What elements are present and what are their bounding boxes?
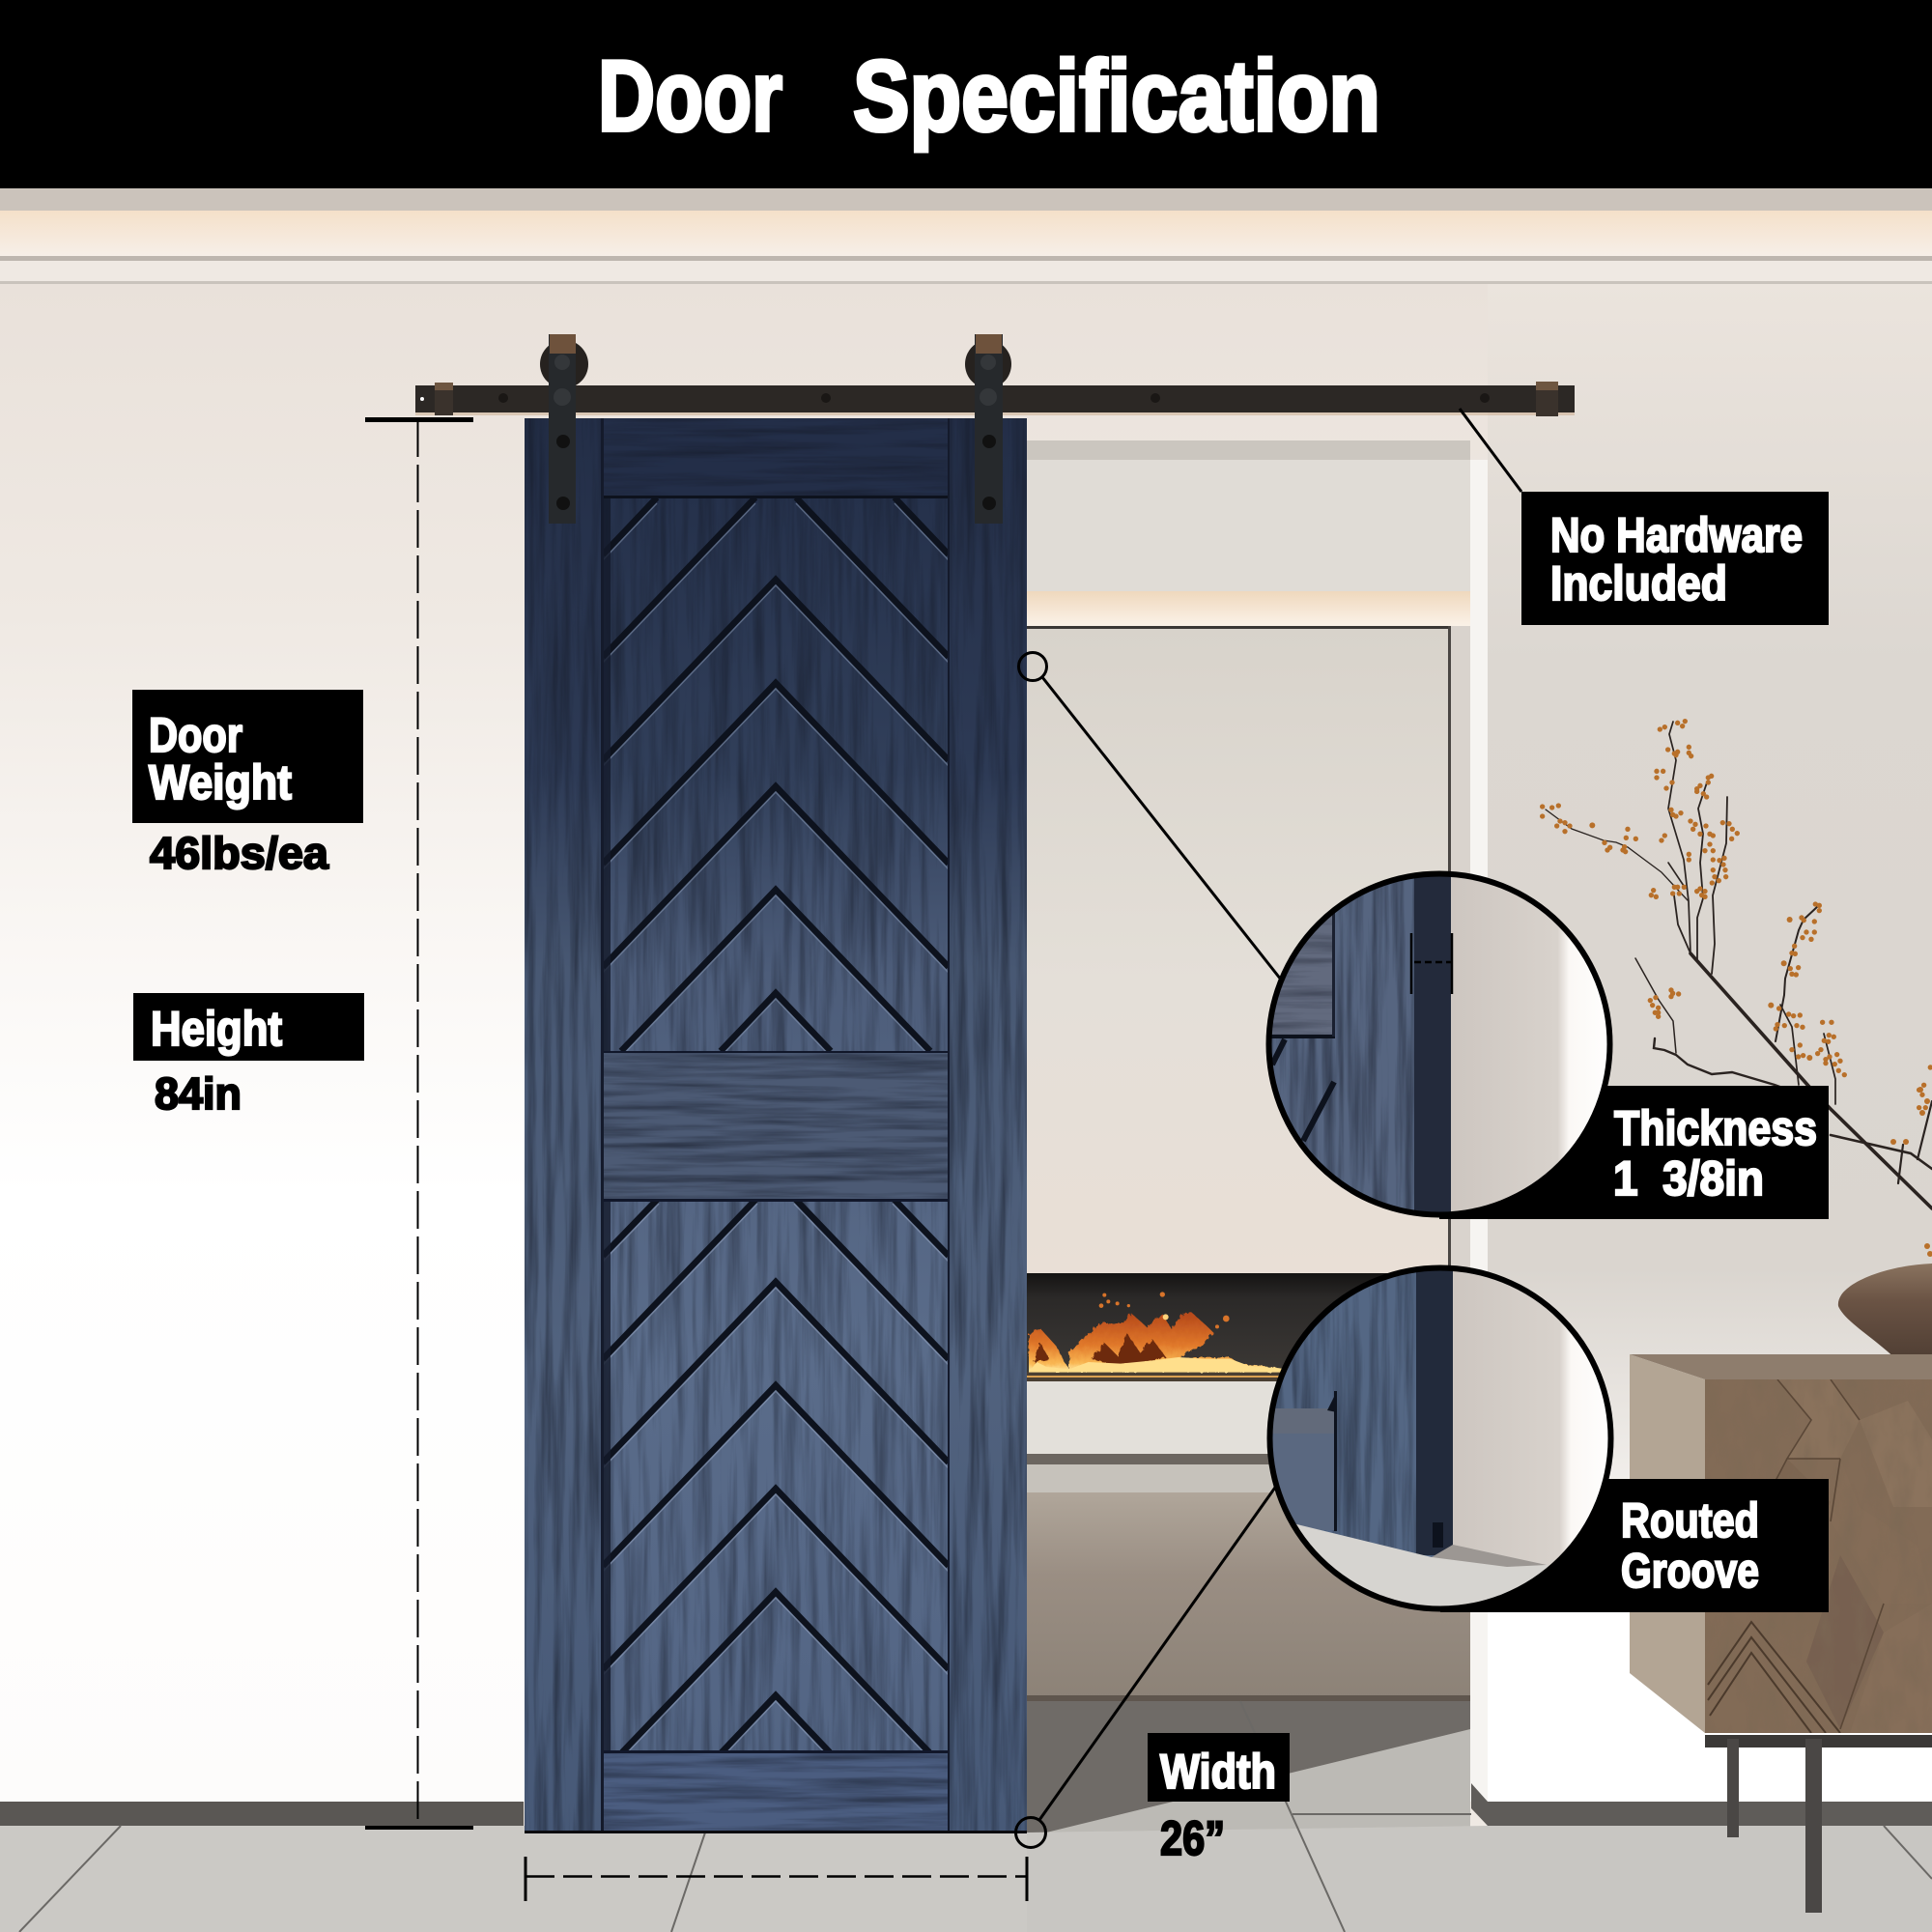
barn door panel bbox=[525, 418, 1027, 1833]
label: door weight: 46lbs/ea bbox=[150, 828, 328, 878]
label: width: 26” bbox=[1160, 1811, 1225, 1865]
right hanger bbox=[965, 334, 1011, 524]
rail stoppers and bolts bbox=[420, 382, 1558, 416]
sliding track hardware bbox=[415, 334, 1575, 524]
plant branches with berries bbox=[1540, 719, 1932, 1257]
title banner: Specification bbox=[853, 41, 1380, 153]
magnifier: door thickness detail bbox=[1265, 873, 1615, 1217]
top rail bbox=[603, 418, 949, 498]
label: height: Height bbox=[151, 1002, 282, 1056]
label: width: Width bbox=[1160, 1745, 1276, 1799]
label: routed groove: Routed bbox=[1621, 1493, 1759, 1548]
label: routed groove bbox=[1440, 1479, 1829, 1612]
label: door weight: Door bbox=[149, 708, 242, 762]
title banner: Door bbox=[598, 41, 782, 153]
label: routed groove: Groove bbox=[1621, 1544, 1759, 1598]
label: door weight bbox=[132, 690, 363, 878]
icon: fireplace flames bbox=[1029, 1292, 1282, 1373]
left hanger bbox=[540, 334, 588, 524]
magnifier: routed groove detail bbox=[1265, 1265, 1623, 1623]
height dimension line bbox=[365, 417, 473, 1830]
label: door weight: Weight bbox=[149, 755, 292, 810]
icon: vase bbox=[1838, 1264, 1932, 1372]
upper chevron panel bbox=[603, 497, 949, 1057]
cabinet legs bbox=[1705, 1735, 1932, 1913]
middle rail bbox=[603, 1051, 949, 1202]
label: thickness: Thickness bbox=[1614, 1101, 1817, 1155]
label: height: 84in bbox=[155, 1068, 242, 1119]
lower right berries bbox=[1890, 1087, 1932, 1257]
cabinet body bbox=[1630, 1354, 1932, 1733]
label: thickness: 1 3/8in bbox=[1613, 1151, 1764, 1206]
berries bbox=[1540, 719, 1932, 1110]
leader lines and anchor circles bbox=[1016, 409, 1521, 1847]
floor and baseboards bbox=[0, 1701, 1932, 1932]
doorway interior view bbox=[1027, 440, 1470, 1833]
lower chevron panel bbox=[603, 1198, 949, 1758]
width dimension line bbox=[526, 1857, 1027, 1901]
label: no hardware included: No Hardware bbox=[1550, 508, 1803, 562]
title banner bbox=[0, 0, 1932, 188]
label: thickness bbox=[1439, 1086, 1829, 1219]
track rail bbox=[415, 385, 1575, 412]
label: height bbox=[133, 993, 364, 1119]
branches bbox=[1546, 722, 1932, 1208]
cabinet with vase bbox=[1630, 1264, 1932, 1913]
label: width bbox=[1148, 1733, 1290, 1865]
label: no hardware included bbox=[1521, 492, 1829, 625]
bottom rail bbox=[603, 1750, 949, 1833]
label: no hardware included: Included bbox=[1550, 556, 1727, 611]
